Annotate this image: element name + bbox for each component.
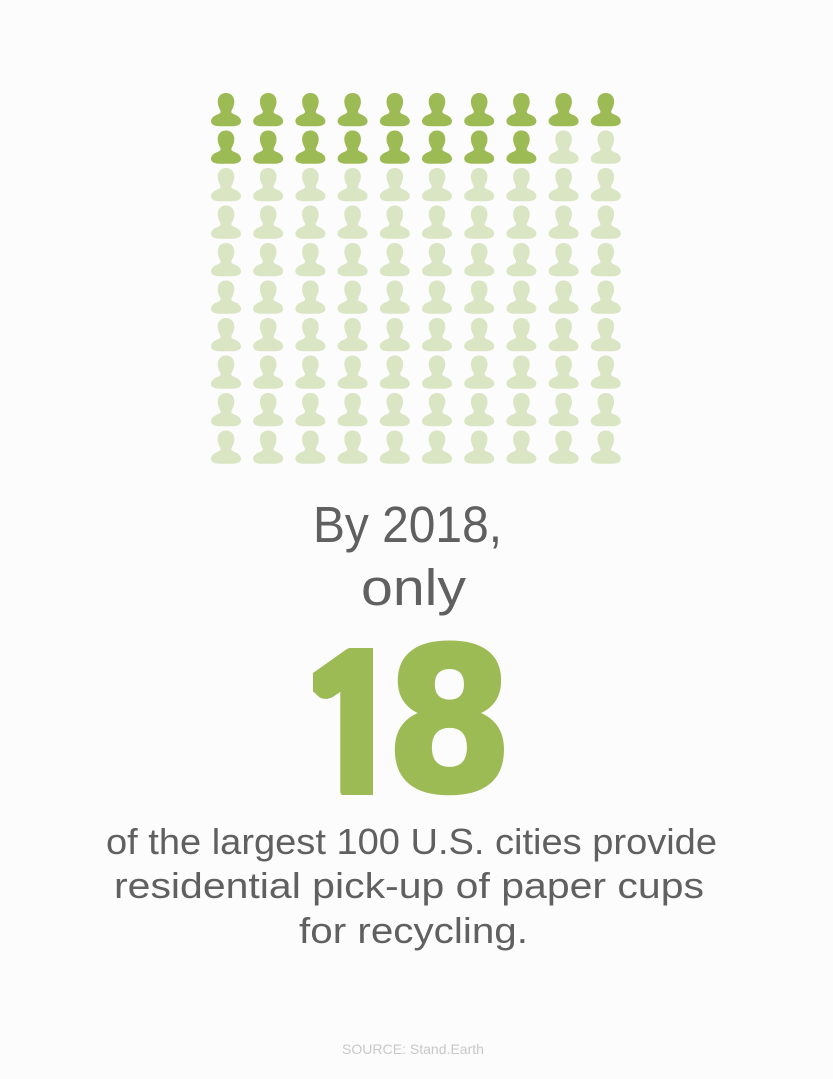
big number: 18 (313, 640, 504, 796)
heading: By 2018, only: only (361, 559, 467, 616)
heading: By 2018, only: By 2018, (313, 496, 502, 553)
body text: description: of the largest 100 U.S. cities provide (106, 821, 717, 862)
highlighted people: 18 green icons (211, 93, 621, 164)
body text: description (106, 821, 717, 951)
big number: 18: 1 (281, 638, 428, 821)
body text: description: for recycling. (299, 910, 528, 951)
pictogram grid: 100 people, 18 highlighted (211, 93, 621, 464)
source note: SOURCE: Stand.Earth (342, 1041, 484, 1057)
remaining people: 82 pale icons (211, 130, 621, 464)
big number: 18: 8 (386, 606, 513, 837)
body text: description: residential pick-up of paper cups (114, 865, 704, 906)
heading: By 2018, only (313, 496, 502, 616)
